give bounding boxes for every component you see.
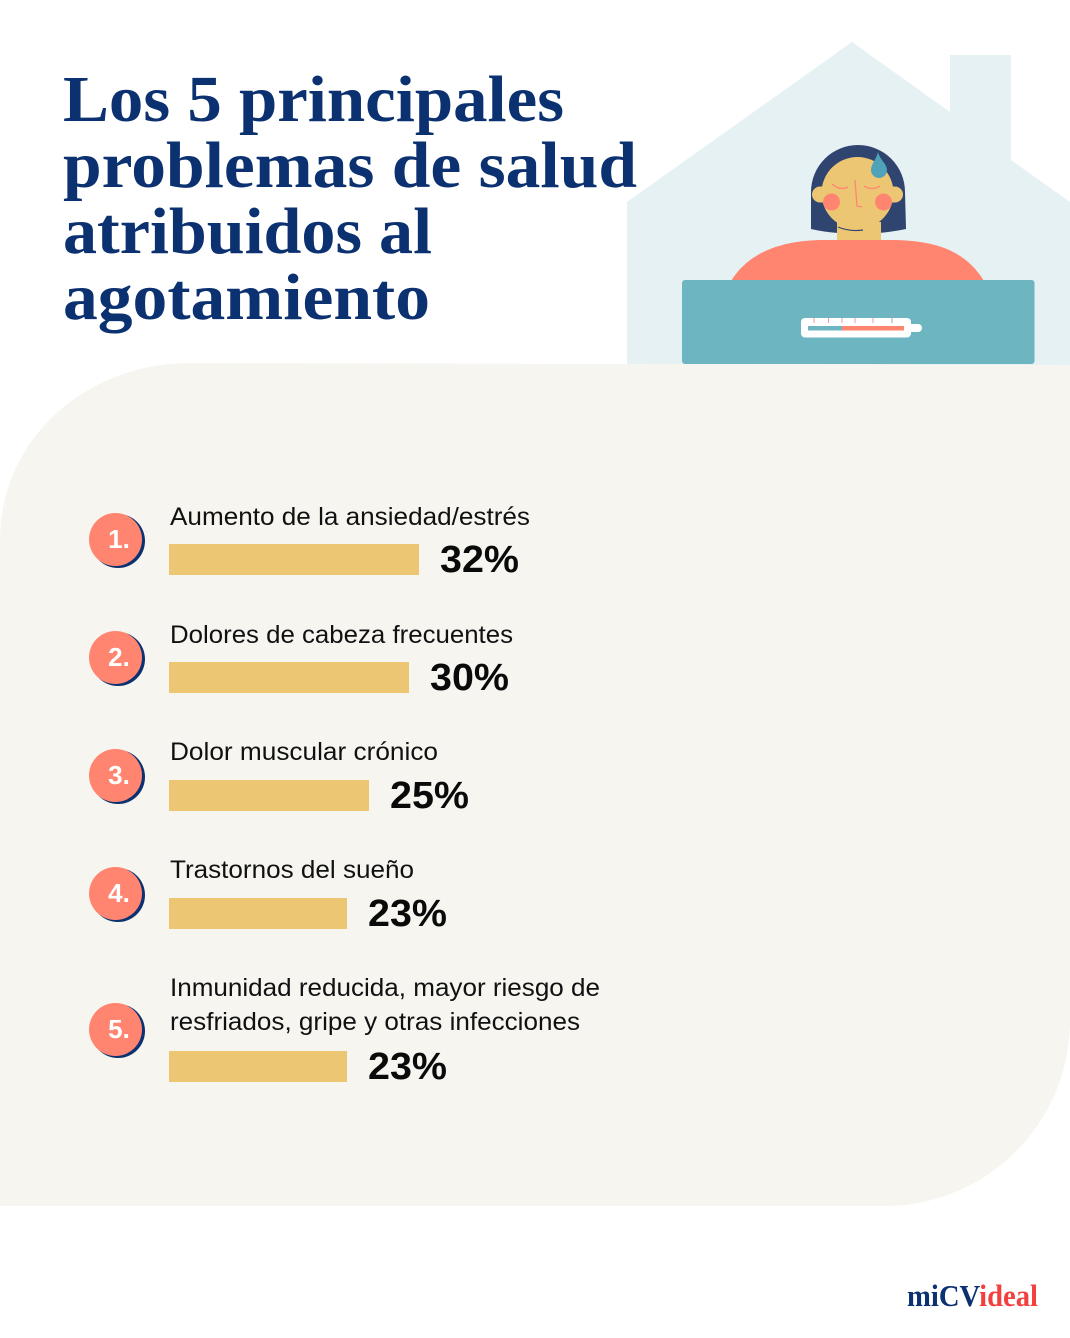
badge 5 [89,1003,145,1058]
thermometer [801,314,922,338]
bar 4 [169,898,347,929]
list item 3 [89,738,469,817]
bar 2 [169,662,409,693]
label 3: Dolor muscular crónico [170,738,438,766]
value 2: 30% [430,657,509,699]
badge 5: 5. [108,1014,130,1044]
value 3: 25% [390,775,469,817]
badge 2 [89,631,145,686]
badge 1 [89,513,145,568]
list item 1 [89,503,530,581]
label 5 [170,974,600,1036]
neck [837,222,881,242]
illustration: sick person at home [627,42,1070,366]
list item 2 [89,621,513,699]
title: problemas de salud [63,129,637,202]
title [63,63,637,334]
label 4: Trastornos del sueño [170,856,414,884]
badge 4 [89,867,145,922]
person [731,145,984,281]
value 4: 23% [368,893,447,935]
face [822,157,894,229]
badge 3: 3. [108,760,130,790]
title: atribuidos al [63,195,432,268]
ears [812,186,903,202]
list item 5 [89,974,600,1088]
label 5: Inmunidad reducida, mayor riesgo de [170,974,600,1002]
label 5: resfriados, gripe y otras infecciones [170,1008,580,1036]
value 5: 23% [368,1046,447,1088]
closed eyes and nose [832,180,880,207]
cheeks [823,194,892,210]
bar 5 [169,1051,347,1082]
value 1: 32% [440,539,519,581]
panel: ranking background [0,363,1070,1206]
label 1: Aumento de la ansiedad/estrés [170,503,530,531]
house silhouette [627,42,1070,366]
title: Los 5 principales [63,63,564,136]
torso [731,240,984,281]
title: agotamiento [63,261,430,334]
list item 4 [89,856,447,935]
badge 4: 4. [108,878,130,908]
badge 3 [89,749,145,804]
bar 3 [169,780,369,811]
hair [811,145,906,233]
blanket [682,280,1034,364]
badge 2: 2. [108,642,130,672]
sweat drop [871,152,887,178]
label 2: Dolores de cabeza frecuentes [170,621,513,649]
badge 1: 1. [108,524,130,554]
bar 1 [169,544,419,575]
logo: miCVideal [907,1278,1038,1313]
smile [838,227,863,231]
